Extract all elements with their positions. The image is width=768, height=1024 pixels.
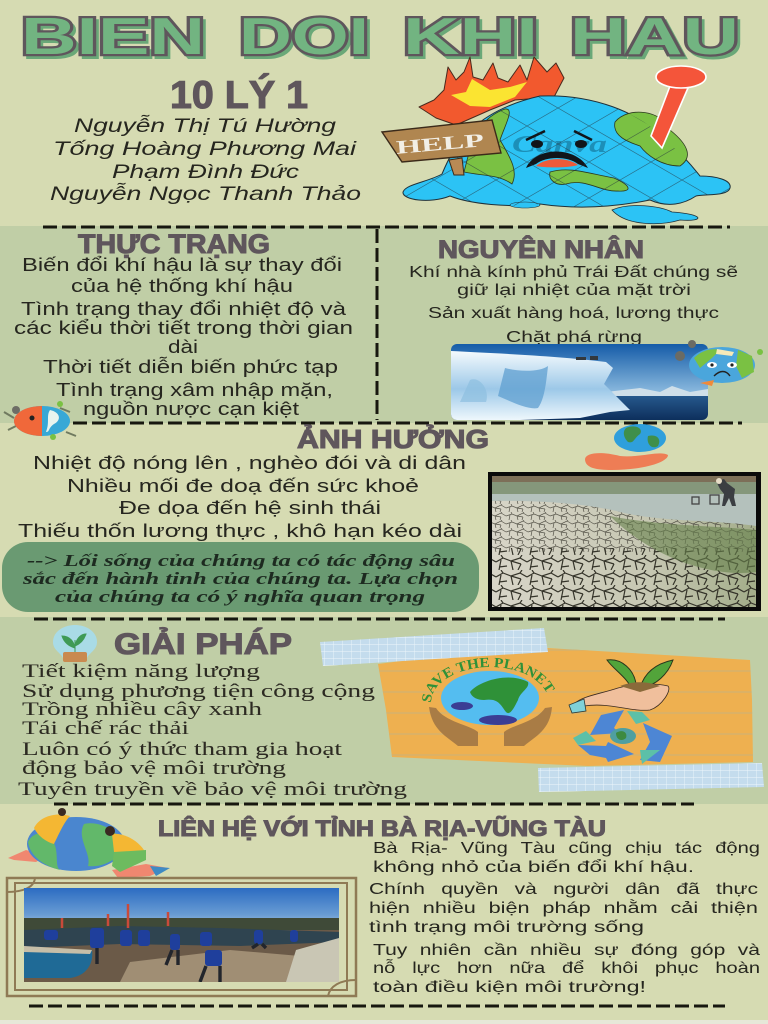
text: local context: nỗ lực hơn nữa để khôi phục hoàn xyxy=(373,958,760,977)
text: nguyên nhân items: Khí nhà kính phủ Trái Đất chúng sẽ xyxy=(409,264,738,281)
text: thực trạng items: Biến đổi khí hậu là sự thay đổi xyxy=(22,255,342,275)
callout: --> Lối sống của chúng ta có tác động sâu xyxy=(27,551,455,570)
class name: 10 LÝ 1 xyxy=(170,73,308,117)
text: nguyên nhân items xyxy=(409,264,738,346)
hand with seedling xyxy=(569,660,673,713)
icon: globe in hand xyxy=(585,424,668,470)
help sign xyxy=(449,158,464,175)
text: giải pháp items: Sử dụng phương tiện công cộng xyxy=(22,681,376,702)
text: giải pháp items: Luôn có ý thức tham gia hoạt xyxy=(22,739,343,760)
yellow flame xyxy=(451,79,527,107)
text: local context: không nhỏ của biến đổi khí hậu. xyxy=(373,858,694,876)
title: DOI xyxy=(242,11,372,69)
panel: thực trạng xyxy=(14,229,353,419)
heading: liên hệ: LIÊN HỆ VỚI TỈNH BÀ RỊA-VŨNG TÀU xyxy=(158,816,606,841)
icon: left sad earth xyxy=(4,401,76,440)
grid overlay on globe xyxy=(403,96,730,207)
text: ảnh hưởng items: Nhiệt độ nóng lên , nghèo đói và di dân xyxy=(33,452,466,473)
icon: right sad earth xyxy=(675,340,763,386)
text: ảnh hưởng items: Nhiều mối đe doạ đến sức khoẻ xyxy=(67,475,419,496)
text: thực trạng items: dài xyxy=(168,337,198,357)
panel: liên hệ bà rịa vũng tàu xyxy=(7,808,760,996)
icon: light bulb with plant xyxy=(53,625,97,662)
text: thực trạng items: nguồn nược cạn kiệt xyxy=(83,399,299,419)
panel: nguyên nhân xyxy=(409,234,763,420)
text: thực trạng items: Thời tiết diễn biến phức tạp xyxy=(43,356,338,377)
save the planet globe: SAVE THE PLANET xyxy=(422,658,555,702)
icon: people hugging earth xyxy=(8,808,170,878)
orange paper with save the planet art xyxy=(378,648,753,766)
author names xyxy=(50,114,361,205)
text: nguyên nhân items: Chặt phá rừng xyxy=(506,329,642,346)
text: giải pháp items: Tiết kiệm năng lượng xyxy=(22,661,261,682)
text: thực trạng items: Tình trạng xâm nhập mặn, xyxy=(56,380,333,400)
title: HAU xyxy=(573,11,742,69)
text: thực trạng items: Tình trạng thay đổi nhiệt độ và xyxy=(21,299,347,319)
text: thực trạng items: các kiểu thời tiết trong thời gian xyxy=(14,318,353,338)
sad face xyxy=(531,140,543,148)
washi tape top xyxy=(320,628,548,666)
text: local context: Bà Rịa- Vũng Tàu cũng chịu tác động xyxy=(373,840,760,857)
callout: sắc đến hành tinh của chúng ta. Lựa chọn xyxy=(22,569,458,588)
author names: Phạm Đình Đức xyxy=(112,161,299,183)
icon: melting earth on fire: HELP xyxy=(395,130,485,159)
text: ảnh hưởng items: Thiếu thốn lương thực , khô hạn kéo dài xyxy=(18,520,462,541)
text: thực trạng items: của hệ thống khí hậu xyxy=(71,276,293,296)
text: giải pháp items: Tuyên truyền về bảo vệ môi trường xyxy=(18,779,408,800)
text: thực trạng items xyxy=(14,255,353,419)
text: local context: Chính quyền và người dân đã thực xyxy=(369,881,758,898)
photo: iceberg xyxy=(451,344,708,420)
text: local context xyxy=(369,840,760,996)
heading: giải pháp: GIẢI PHÁP xyxy=(114,627,292,661)
panel: ảnh hưởng xyxy=(2,423,761,612)
panel: giải pháp xyxy=(18,625,764,800)
title xyxy=(21,8,742,69)
save the planet globe xyxy=(422,658,555,746)
photo: beach clean-up xyxy=(24,888,339,982)
text: local context: toàn điều kiện môi trường! xyxy=(373,979,646,996)
recycle symbol xyxy=(573,710,672,764)
photo frame xyxy=(7,878,356,996)
text: local context: Tuy nhiên cần nhiều sự đóng góp và xyxy=(373,942,760,959)
text: giải pháp items: động bảo vệ môi trường xyxy=(22,758,287,779)
text: local context: hiện nhiều biện pháp nhằm cải thiện xyxy=(369,898,758,917)
callout: của chúng ta có ý nghĩa quan trọng xyxy=(55,587,425,606)
author names: Nguyễn Ngọc Thanh Thảo xyxy=(50,182,361,205)
heading: nguyên nhân: NGUYÊN NHÂN xyxy=(438,234,644,264)
text: nguyên nhân items: Sản xuất hàng hoá, lương thực xyxy=(428,305,719,322)
melting globe xyxy=(403,96,730,207)
text: ảnh hưởng items: Đe dọa đến hệ sinh thái xyxy=(119,497,381,518)
text: nguyên nhân items: giữ lại nhiệt của mặt trời xyxy=(457,282,691,299)
watermark: Canva xyxy=(512,132,607,158)
author names: Nguyễn Thị Tú Hường xyxy=(74,114,336,137)
text: giải pháp items xyxy=(18,661,408,800)
title: DOI xyxy=(239,8,369,66)
author names: Tống Hoàng Phương Mai xyxy=(53,138,357,160)
thermometer xyxy=(651,86,688,148)
title: KHI xyxy=(403,8,538,66)
flames xyxy=(419,57,564,125)
washi tape bottom xyxy=(538,763,764,792)
callout xyxy=(2,542,479,612)
title: HAU xyxy=(570,8,739,66)
text: local context: tình trạng môi trường sống xyxy=(369,919,644,936)
title: BIEN xyxy=(24,11,208,69)
title: BIEN xyxy=(21,8,205,66)
photo: cracked dry land xyxy=(488,472,761,611)
text: giải pháp items: Trồng nhiều cây xanh xyxy=(22,699,263,720)
icon: melting earth on fire xyxy=(382,57,730,224)
heading: thực trạng: THỰC TRẠNG xyxy=(78,229,270,259)
text: giải pháp items: Tái chế rác thải xyxy=(22,718,189,739)
heading: ảnh hưởng: ẢNH HƯỞNG xyxy=(297,423,489,454)
continents xyxy=(464,109,514,184)
text: ảnh hưởng items xyxy=(18,452,466,541)
title: KHI xyxy=(406,11,541,69)
